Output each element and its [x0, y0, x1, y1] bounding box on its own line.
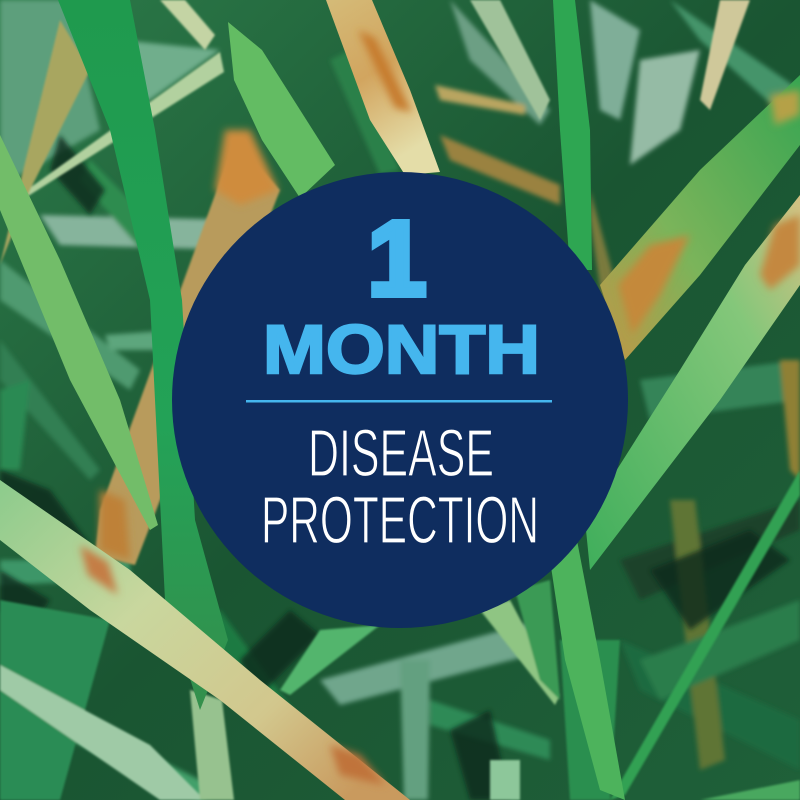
foreground blade: lower centre vertical	[550, 530, 625, 800]
text: DISEASE: DISEASE	[308, 416, 494, 491]
foreground blade: upper right diseased	[600, 75, 800, 360]
foreground blade: tall green left	[58, 0, 228, 710]
lesions on mid blades	[100, 130, 278, 560]
heading: MONTH: MONTH	[263, 311, 540, 388]
number: 1: 1	[368, 200, 426, 318]
foreground blade: right long	[585, 195, 800, 570]
foreground blade: lower left diseased	[0, 480, 410, 800]
text: PROTECTION: PROTECTION	[261, 483, 539, 558]
foreground blade: narrow light left	[0, 135, 158, 530]
divider line	[246, 400, 552, 402]
foreground blade: centre vertical green	[553, 0, 592, 270]
badge: navy circle	[172, 172, 628, 628]
foreground blade: top centre diseased	[326, 0, 440, 175]
foreground blade: top centre green	[228, 22, 335, 198]
